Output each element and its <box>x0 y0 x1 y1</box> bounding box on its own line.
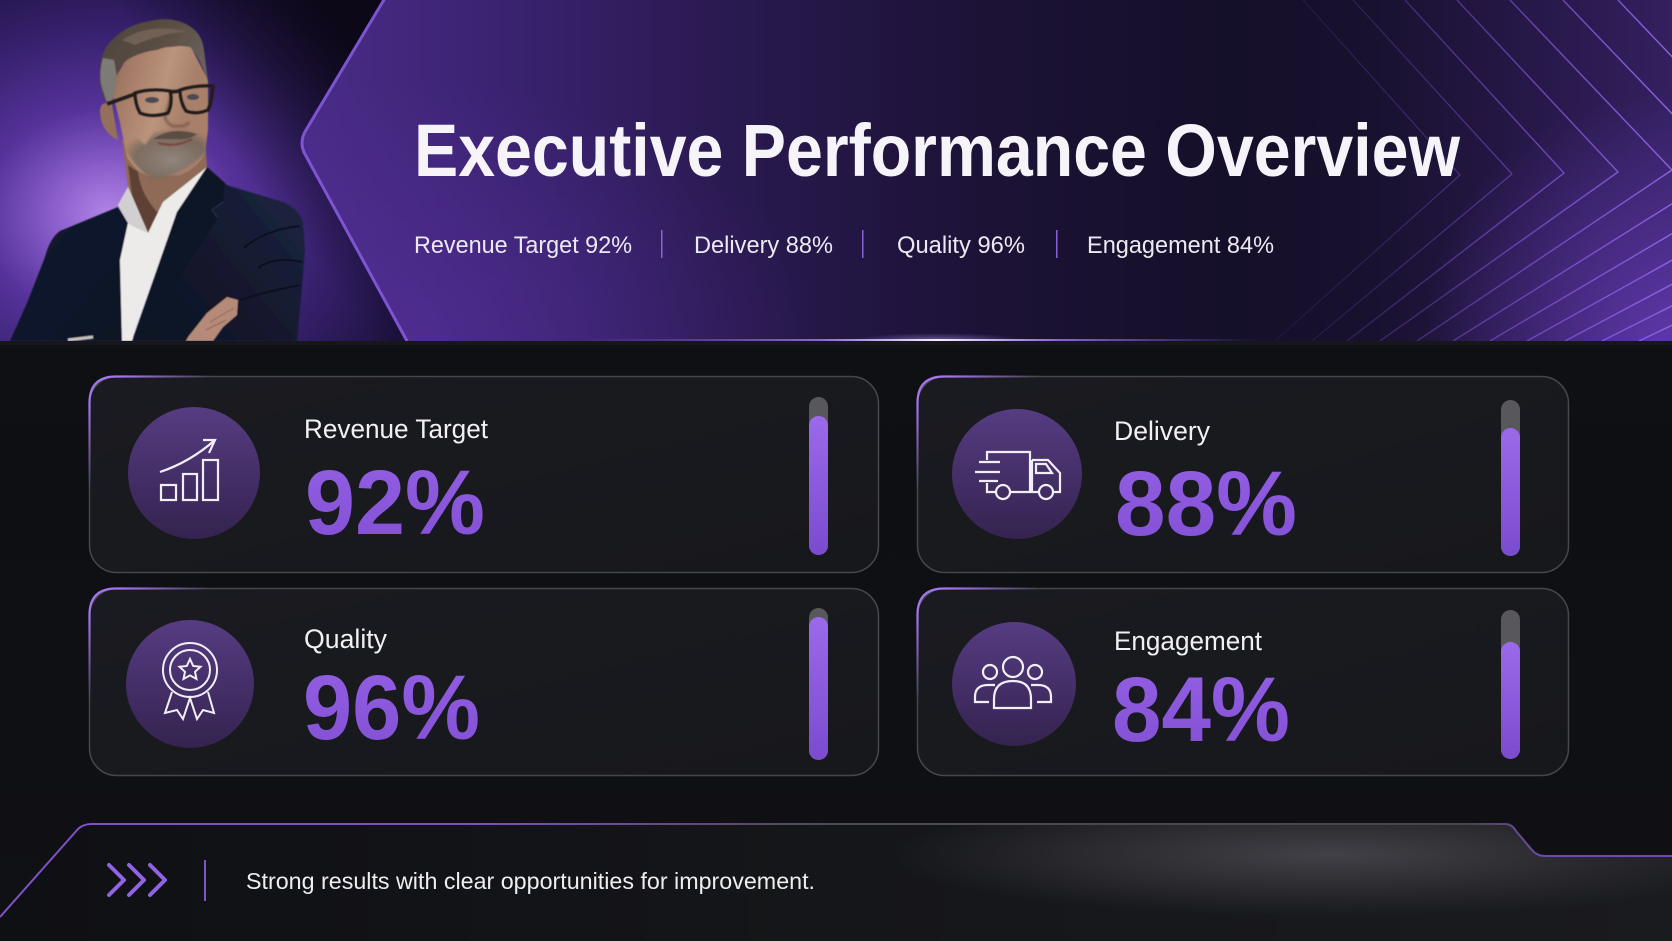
executive portrait <box>10 19 305 341</box>
icon: delivery truck <box>952 409 1082 539</box>
shirt <box>118 167 207 341</box>
icon: team <box>952 622 1076 746</box>
eyes <box>145 97 159 103</box>
lapels and sleeve shading <box>132 167 225 341</box>
panel: quality <box>90 588 878 776</box>
title: Executive Performance Overview <box>414 109 1460 192</box>
value: 84% <box>1112 659 1290 761</box>
value: 92% <box>305 452 485 554</box>
chevron line pattern <box>1275 0 1672 341</box>
progress bar <box>1501 400 1520 556</box>
header stats row: Engagement 84% <box>1087 232 1274 259</box>
face <box>113 45 208 177</box>
label: Delivery <box>1114 416 1210 446</box>
header glow line <box>596 334 1250 341</box>
icon: triple chevron <box>109 865 165 895</box>
header stats row: Quality 96% <box>897 232 1025 259</box>
progress bar <box>809 397 828 555</box>
hand <box>186 297 238 341</box>
icon: award ribbon <box>126 620 254 748</box>
value: 88% <box>1115 453 1297 555</box>
header banner <box>0 0 1672 342</box>
header stats row <box>414 230 1274 259</box>
label: Engagement <box>1114 626 1262 656</box>
moustache and mouth <box>153 131 197 139</box>
value: 96% <box>303 657 480 759</box>
footer message: Strong results with clear opportunities for improvement. <box>246 868 815 894</box>
panel: delivery <box>918 376 1568 572</box>
ear <box>100 103 118 140</box>
nose shadow <box>165 92 189 126</box>
label: Quality <box>304 624 387 654</box>
jacket right <box>132 167 305 341</box>
hair <box>100 19 208 103</box>
icon: growth chart <box>128 407 260 539</box>
header stats row: Delivery 88% <box>694 232 833 259</box>
beard <box>126 130 207 178</box>
header stats row: Revenue Target 92% <box>414 232 632 259</box>
label: Revenue Target <box>304 414 488 444</box>
progress bar <box>1501 610 1520 759</box>
panel: engagement <box>918 588 1568 776</box>
glasses <box>107 86 213 116</box>
progress bar <box>809 608 828 760</box>
footer divider <box>204 860 206 901</box>
jacket left <box>10 207 128 341</box>
hexagonal title panel <box>300 0 1672 341</box>
neck <box>122 140 208 218</box>
footer banner <box>0 820 1672 941</box>
panel: revenue target <box>90 376 878 572</box>
